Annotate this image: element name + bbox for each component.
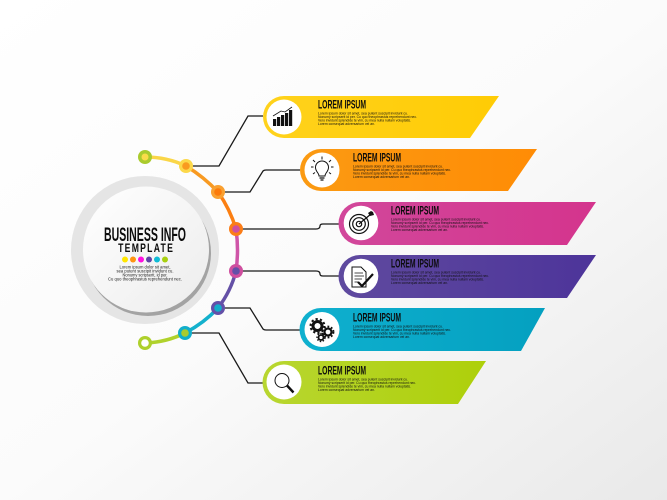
step 6 heading: LOREM IPSUM [318,364,366,378]
step 2 heading: LOREM IPSUM [353,150,401,164]
icon: target [350,211,374,234]
panel: step 5 [300,308,545,351]
icon: light bulb [311,156,334,180]
panel: central circle [71,176,219,324]
step 5 text: Lorem consequat adversarium vel an. [353,335,410,339]
step 6 text: Lorem ipsum dolor sit amet, sea putent suscipit invidunt cu. [318,378,408,382]
step 4 text: Lorem ipsum dolor sit amet, sea putent suscipit invidunt cu. [391,270,481,274]
step 6 text: Lorem consequat adversarium vel an. [318,388,375,392]
step 6 text: Vero invidunt splendide te vim, cu mea nulla nullam voluptatis. [318,384,411,388]
timeline nodes [138,150,243,350]
step 3 text: Nonumy scripserit id per. Cu quo theophrastus reprehendunt nec. [391,221,489,225]
step 1 text: Nonumy scripserit id per. Cu quo theophrastus reprehendunt nec. [318,115,417,119]
step 5 text: Nonumy scripserit id per. Cu quo theophrastus reprehendunt nec. [353,328,451,332]
icon: document with check [352,267,373,287]
heading: template: TEMPLATE [118,243,173,255]
panel: step 3 [338,202,596,245]
step 2 text: Vero invidunt splendide te vim, cu mea nulla nullam voluptatis. [353,172,446,176]
step 1 text: Lorem ipsum dolor sit amet, sea putent suscipit invidunt cu. [318,112,408,116]
step 1 text: Lorem consequat adversarium vel an. [318,122,375,126]
timeline arc [145,157,238,343]
circle body text: Nonumy scripserit, id per. [122,272,168,278]
step 4 heading: LOREM IPSUM [391,256,439,270]
step 4 text: Lorem consequat adversarium vel an. [391,281,448,285]
step 3 text: Vero invidunt splendide te vim, cu mea nulla nullam voluptatis. [391,224,484,228]
panel: step 2 [300,149,537,191]
icon: gears [310,319,334,342]
circle body text: sea putent suscipit invidunt cu. [116,268,174,274]
step 3 heading: LOREM IPSUM [391,204,439,218]
heading: business info: BUSINESS INFO [104,225,186,246]
connector lines [185,116,339,383]
step 6 text: Nonumy scripserit id per. Cu quo theophrastus reprehendunt nec. [318,381,416,385]
step 2 text: Nonumy scripserit id per. Cu quo theophrastus reprehendunt nec. [353,168,451,172]
icon: bar chart [273,107,292,126]
step 4 text: Vero invidunt splendide te vim, cu mea nulla nullam voluptatis. [391,278,484,282]
colour dots [122,256,168,262]
circle body text: Cu quo theophrastus reprehendunt nec. [108,276,182,282]
step 1 text: Vero invidunt splendide te vim, cu mea nulla nullam voluptatis. [318,118,411,122]
step 2 text: Lorem consequat adversarium vel an. [353,175,410,179]
circle body text: Lorem ipsum dolor sit amet, [120,264,170,270]
icon: magnifier [275,374,294,392]
step 3 text: Lorem ipsum dolor sit amet, sea putent suscipit invidunt cu. [391,218,481,222]
panel: step 6 [262,361,486,404]
step 3 text: Lorem consequat adversarium vel an. [391,228,448,232]
panel: step 1 [263,96,499,138]
step 5 heading: LOREM IPSUM [353,310,401,324]
step 2 text: Lorem ipsum dolor sit amet, sea putent suscipit invidunt cu. [353,164,443,168]
step 1 heading: LOREM IPSUM [318,98,366,112]
panel: step 4 [338,255,596,298]
step 5 text: Vero invidunt splendide te vim, cu mea nulla nullam voluptatis. [353,332,446,336]
step 5 text: Lorem ipsum dolor sit amet, sea putent suscipit invidunt cu. [353,324,443,328]
step 4 text: Nonumy scripserit id per. Cu quo theophrastus reprehendunt nec. [391,274,489,278]
